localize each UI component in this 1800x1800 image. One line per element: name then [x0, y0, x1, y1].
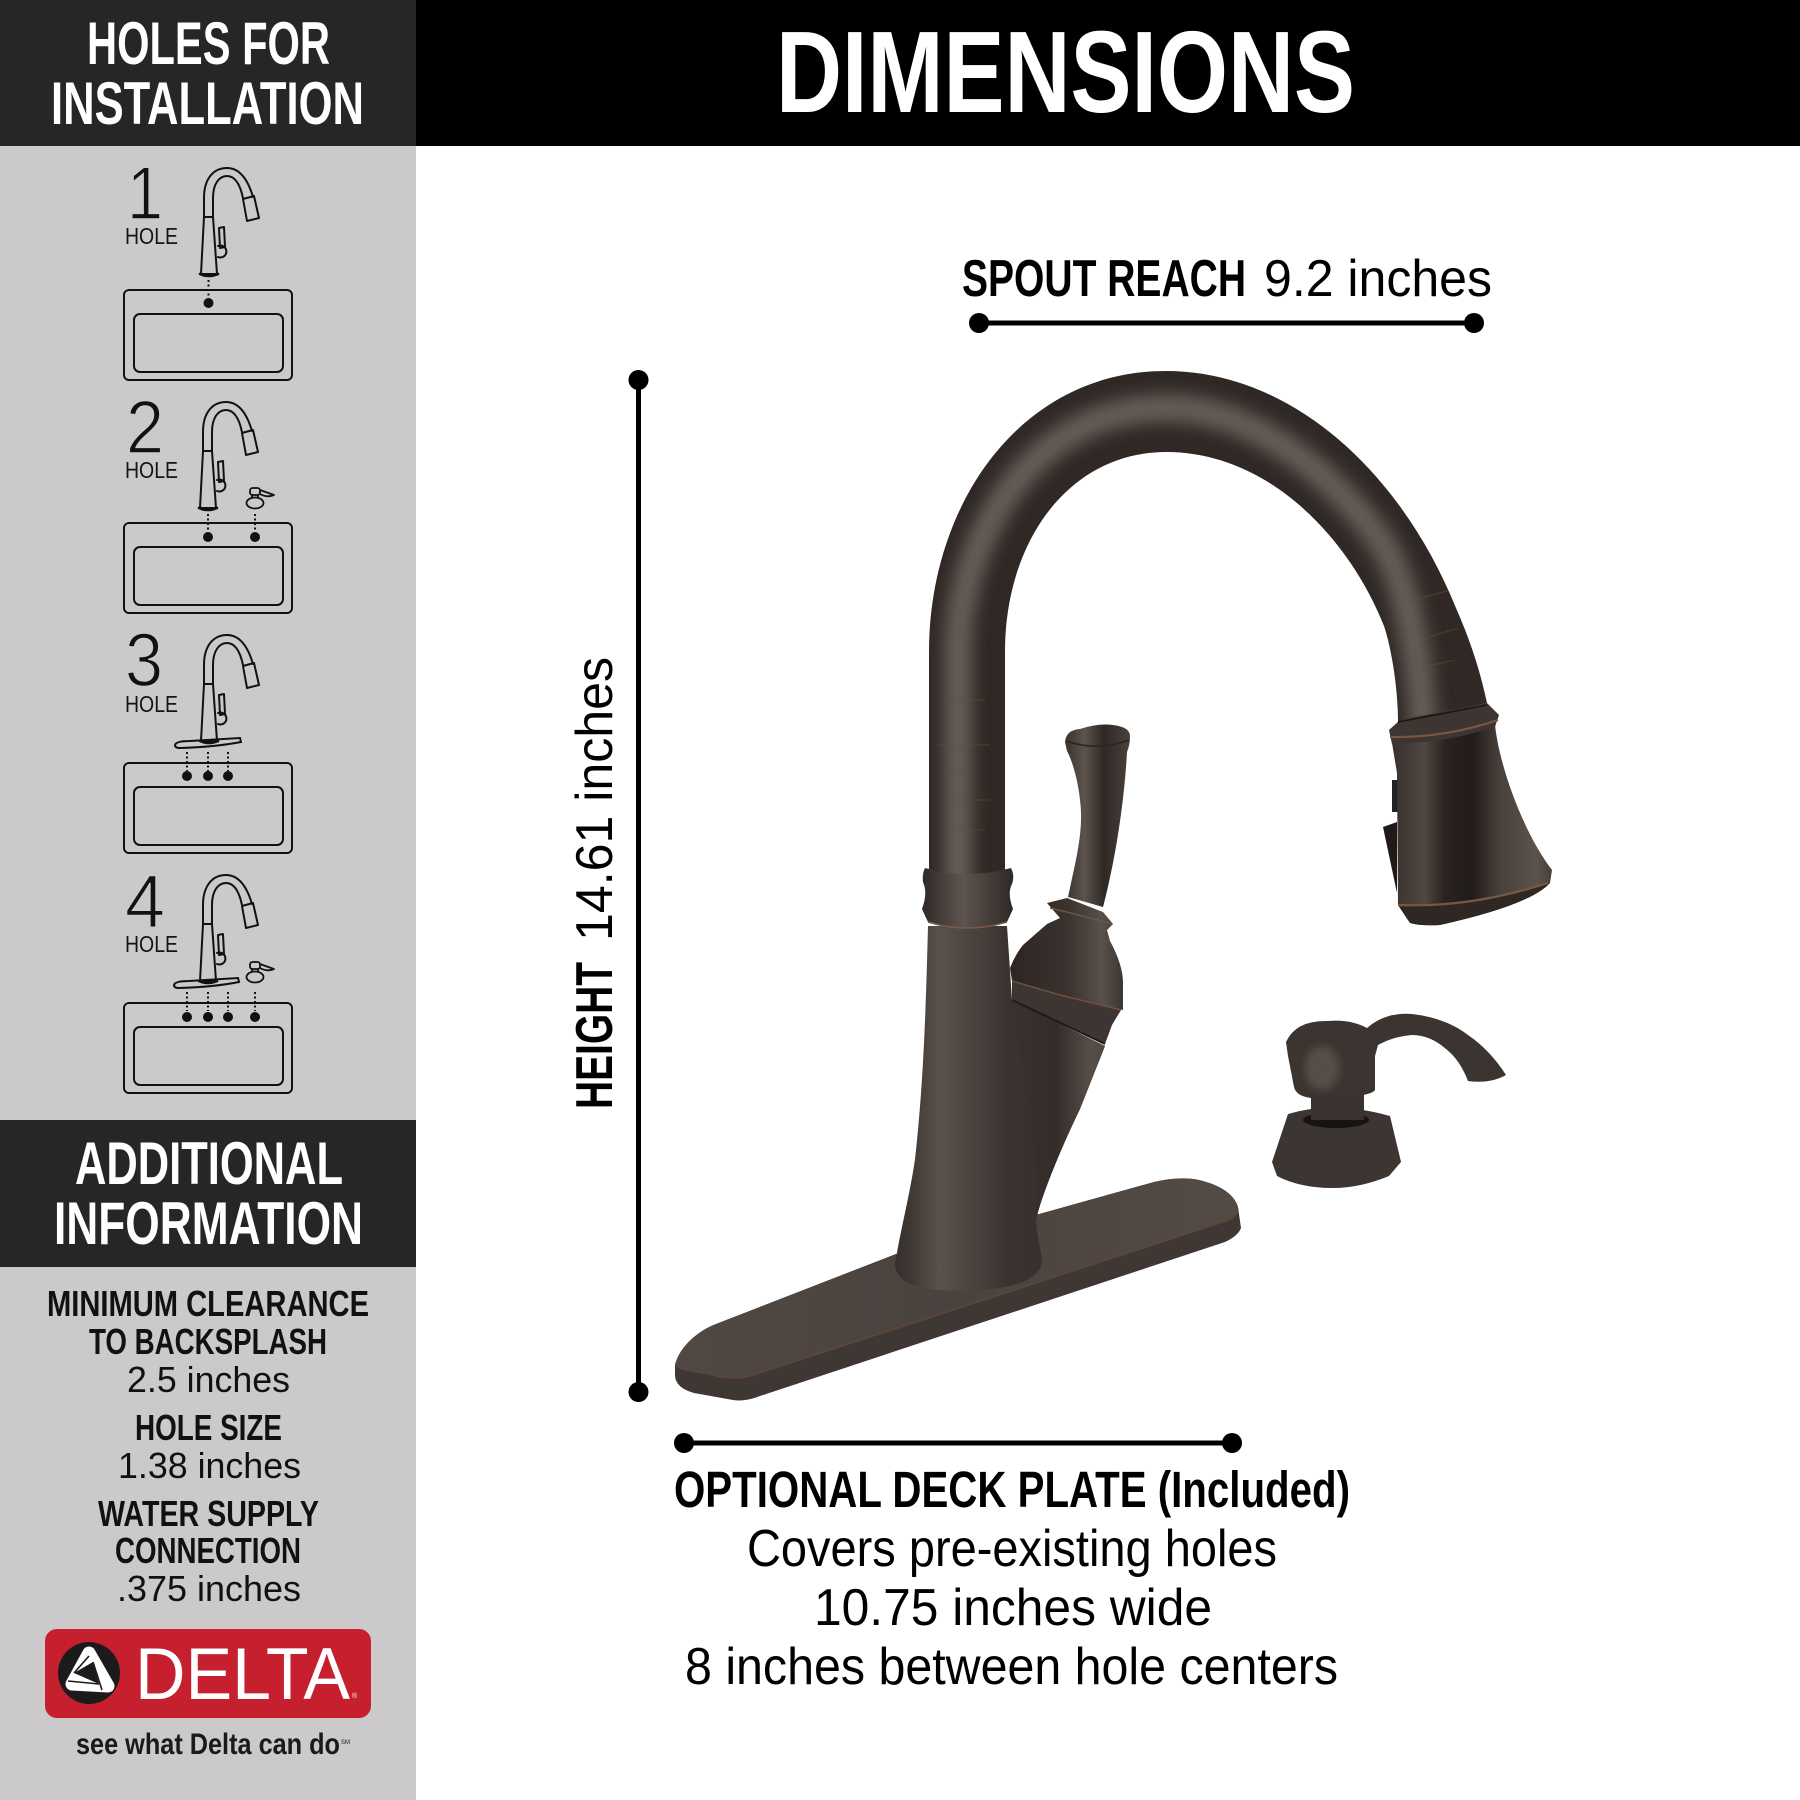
icon: 1 hole installation: [124, 151, 292, 380]
icon: 2 hole installation: HOLE: [125, 457, 178, 483]
panel heading: additional information: ADDITIONAL: [75, 1130, 343, 1197]
icon: 2 hole installation: [124, 385, 292, 613]
icon: 1 hole installation: 1: [127, 151, 163, 235]
text block: minimum clearance: MINIMUM CLEARANCE: [47, 1283, 369, 1324]
icon: 4 hole installation: [124, 859, 292, 1093]
logo: delta: DELTA: [135, 1634, 350, 1715]
text block: optional deck plate: 8 inches between hole centers: [685, 1638, 1338, 1696]
icon: 3 hole installation: HOLE: [125, 691, 178, 717]
dimension line: height: [628, 370, 648, 1402]
dimension label: height: [566, 657, 624, 1109]
icon: delta logo mark: [58, 1642, 120, 1704]
dimension label: spout reach: 9.2 inches: [1264, 250, 1492, 308]
dispenser base: [1272, 1107, 1401, 1188]
panel heading: additional information: INFORMATION: [54, 1190, 363, 1257]
text block: minimum clearance: 2.5 inches: [127, 1359, 290, 1400]
icon: 4 hole installation: 4: [125, 859, 165, 943]
panel heading: holes for installation: HOLES FOR: [87, 10, 330, 77]
text block: water supply connection: .375 inches: [117, 1568, 301, 1609]
faucet body: [895, 926, 1105, 1291]
icon: 3 hole installation: 3: [125, 618, 163, 702]
text block: optional deck plate: 10.75 inches wide: [814, 1579, 1212, 1637]
text block: hole size: 1.38 inches: [118, 1445, 301, 1486]
tagline: SM: [341, 1740, 350, 1746]
title banner: dimensions: [416, 0, 1800, 146]
dimension label: height: HEIGHT: [566, 962, 624, 1109]
product photo: pull-down faucet: [675, 371, 1552, 1400]
dimension label: height: 14.61 inches: [566, 657, 624, 941]
spray head: [1383, 703, 1552, 925]
text block: optional deck plate: OPTIONAL DECK PLATE (Included): [674, 1461, 1350, 1518]
tagline: see what Delta can do: [76, 1728, 340, 1761]
text block: water supply connection: WATER SUPPLY: [98, 1493, 319, 1534]
dispenser neck: [1311, 1085, 1364, 1120]
panel: sidebar background: [0, 146, 416, 1800]
spout: [929, 371, 1487, 890]
text block: minimum clearance: TO BACKSPLASH: [89, 1321, 327, 1362]
text block: hole size: HOLE SIZE: [135, 1407, 282, 1448]
logo: delta: ®: [352, 1692, 358, 1700]
dimension label: spout reach: SPOUT REACH: [962, 250, 1246, 308]
panel heading: additional information: [0, 1120, 416, 1267]
text block: water supply connection: CONNECTION: [115, 1530, 301, 1571]
panel heading: holes for installation: INSTALLATION: [51, 70, 364, 137]
cap highlight: [1305, 1046, 1339, 1090]
base opening: [1303, 1112, 1369, 1128]
title banner: dimensions: DIMENSIONS: [776, 7, 1355, 137]
lever handle and hub: [1010, 724, 1130, 1044]
panel heading: holes for installation: [0, 0, 416, 146]
dimension line: spout reach: [969, 313, 1484, 333]
icon: 1 hole installation: HOLE: [125, 223, 178, 249]
dispenser cap and spout: [1286, 1014, 1506, 1098]
icon: 2 hole installation: 2: [126, 385, 164, 469]
text block: hole size: [118, 1407, 301, 1486]
text block: optional deck plate: [674, 1461, 1350, 1696]
deck plate: [675, 1178, 1241, 1400]
product photo: soap dispenser: [1272, 1014, 1506, 1188]
text block: minimum clearance: [47, 1283, 369, 1400]
text block: water supply connection: [98, 1493, 319, 1609]
collar ring: [922, 868, 1013, 928]
logo: delta: [45, 1629, 371, 1718]
icon: 3 hole installation: [124, 618, 292, 853]
dimension line: deck plate: [674, 1433, 1242, 1453]
text block: optional deck plate: Covers pre-existing holes: [747, 1520, 1277, 1578]
icon: 4 hole installation: HOLE: [125, 931, 178, 957]
